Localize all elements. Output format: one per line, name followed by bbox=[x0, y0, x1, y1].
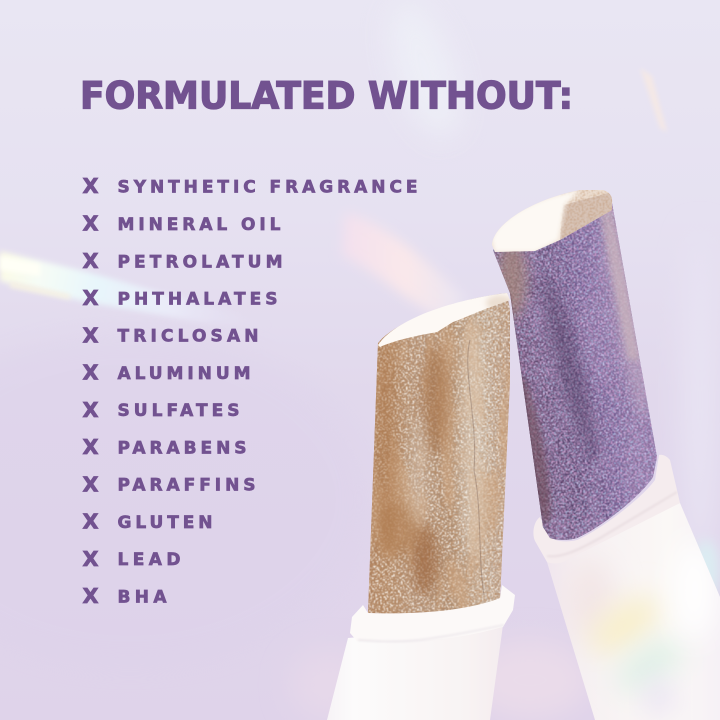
light streak top right bbox=[640, 68, 667, 132]
item: aluminum: ALUMINUM bbox=[118, 364, 250, 384]
item: parabens: X bbox=[82, 435, 99, 459]
item: lead: LEAD bbox=[118, 550, 180, 570]
left glitter bullet bbox=[368, 293, 510, 614]
left bullet top face bbox=[378, 293, 510, 347]
item: bha bbox=[82, 584, 167, 608]
item: parabens bbox=[82, 435, 246, 459]
item: sulfates bbox=[82, 398, 240, 422]
item: sulfates: SULFATES bbox=[118, 401, 240, 421]
item: bha: X bbox=[82, 584, 99, 608]
item: synthetic fragrance: X bbox=[82, 174, 99, 198]
item: bha: BHA bbox=[118, 588, 167, 608]
item: lead: X bbox=[82, 547, 99, 571]
item: phthalates bbox=[82, 286, 278, 310]
item: gluten: GLUTEN bbox=[118, 513, 212, 533]
right bullet top face bbox=[492, 190, 612, 252]
item: triclosan bbox=[82, 324, 258, 348]
item: petrolatum: PETROLATUM bbox=[118, 252, 282, 272]
item: petrolatum bbox=[82, 249, 282, 273]
item: gluten bbox=[82, 510, 212, 534]
item: synthetic fragrance: SYNTHETIC FRAGRANCE bbox=[118, 178, 418, 198]
right tube bbox=[533, 455, 720, 720]
item: mineral oil: X bbox=[82, 212, 99, 236]
left tube bbox=[327, 585, 515, 720]
item: paraffins bbox=[82, 472, 256, 496]
item: mineral oil: MINERAL OIL bbox=[118, 215, 281, 235]
item: mineral oil bbox=[82, 212, 281, 236]
right lipstick bbox=[492, 190, 720, 720]
right glitter bullet bbox=[493, 203, 657, 540]
title: FORMULATED WITHOUT: bbox=[80, 74, 573, 118]
ingredient list bbox=[82, 174, 418, 608]
item: parabens: PARABENS bbox=[118, 438, 246, 458]
item: sulfates: X bbox=[82, 398, 99, 422]
item: triclosan: X bbox=[82, 324, 99, 348]
item: phthalates: PHTHALATES bbox=[118, 289, 278, 309]
item: phthalates: X bbox=[82, 286, 99, 310]
item: triclosan: TRICLOSAN bbox=[118, 327, 258, 347]
item: paraffins: PARAFFINS bbox=[118, 476, 256, 496]
right tube rim bbox=[533, 455, 680, 564]
left lipstick bbox=[327, 280, 520, 720]
item: petrolatum: X bbox=[82, 249, 99, 273]
item: paraffins: X bbox=[82, 472, 99, 496]
item: gluten: X bbox=[82, 510, 99, 534]
item: aluminum bbox=[82, 360, 250, 384]
item: lead bbox=[82, 547, 180, 571]
item: aluminum: X bbox=[82, 360, 99, 384]
left tube rim bbox=[350, 585, 515, 641]
light beam left bbox=[0, 251, 290, 330]
rainbow light streak bbox=[342, 213, 468, 318]
